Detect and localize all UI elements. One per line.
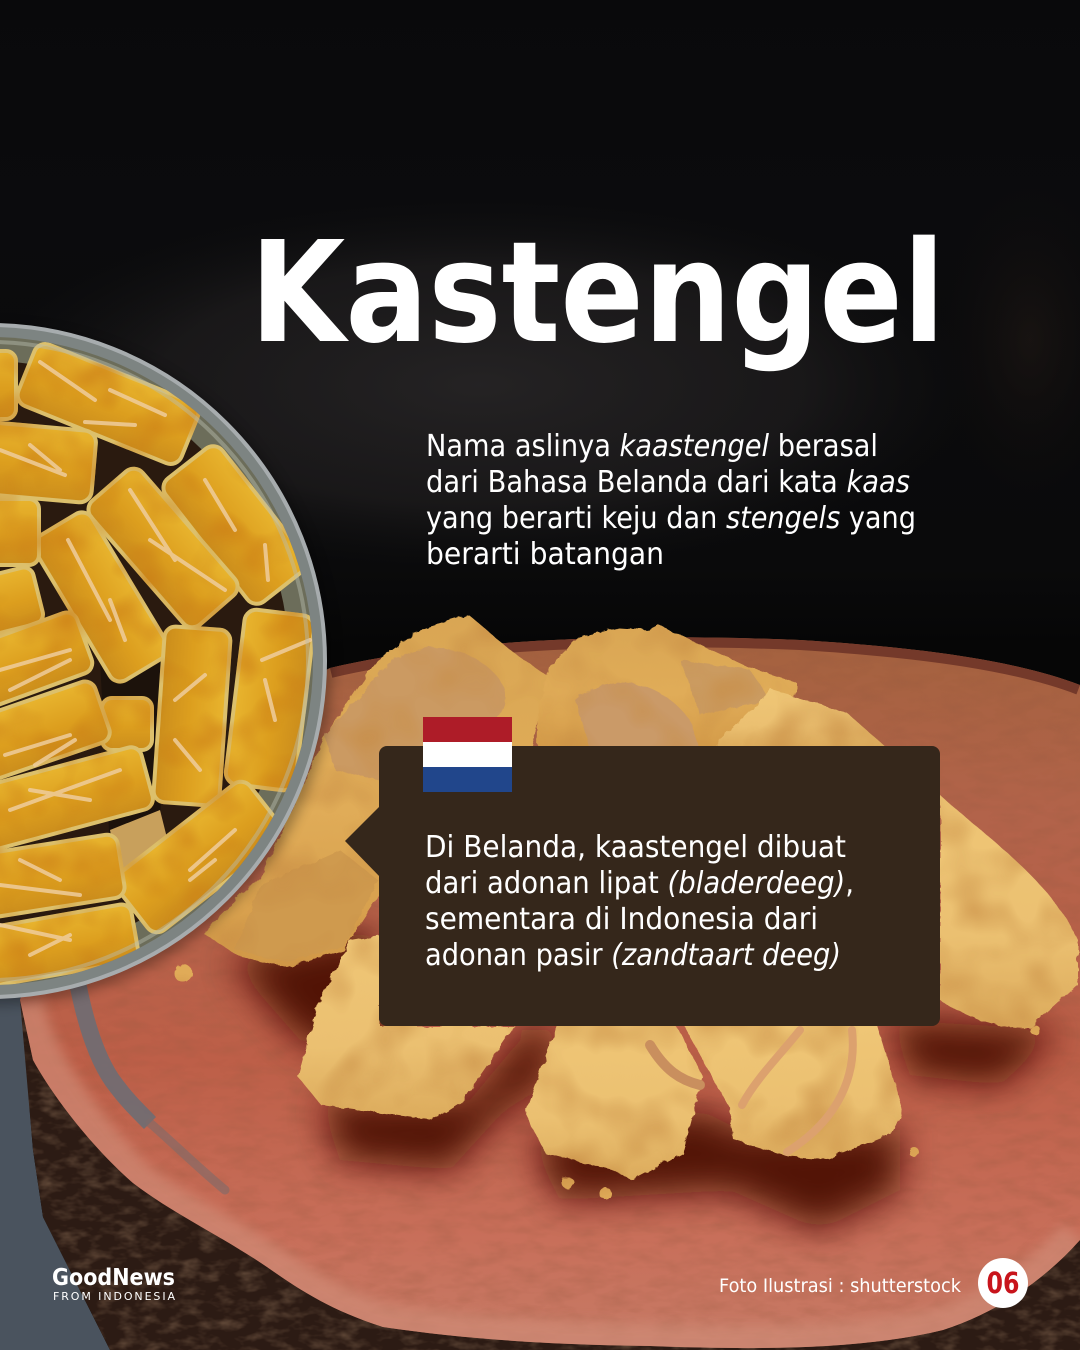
logo: GoodNews from Indonesia <box>52 1265 175 1303</box>
grey stain band <box>78 985 150 1123</box>
page number badge: 06 <box>986 1266 1020 1300</box>
jar rim <box>0 325 325 997</box>
photo: kastengel cookies on slab <box>174 615 1078 1230</box>
callout text: dari adonan lipat (bladerdeeg), <box>425 866 854 901</box>
pale outer ring <box>20 1000 1080 1348</box>
text block: origin of the name: yang berarti keju dan stengels yang <box>426 501 916 536</box>
panel: dough comparison callout <box>345 717 940 1026</box>
photo: jar of cookies <box>0 325 332 1005</box>
photo credit: Foto Ilustrasi : shutterstock <box>719 1275 961 1297</box>
callout text: adonan pasir (zandtaart deeg) <box>425 938 841 973</box>
glass highlight <box>0 342 308 980</box>
page number badge <box>978 1258 1028 1308</box>
callout text: Di Belanda, kaastengel dibuat <box>425 830 846 865</box>
text block: origin of the name <box>426 429 916 572</box>
cookie: top left <box>203 615 549 967</box>
cookie: bottom right <box>683 1024 903 1160</box>
cheese strips <box>742 1030 853 1152</box>
cookie: top right <box>712 690 887 748</box>
callout pointer <box>345 805 381 878</box>
icon: Dutch flag <box>423 717 512 792</box>
cookie: bottom centre <box>525 1024 703 1180</box>
text block: origin of the name: berarti batangan <box>426 537 664 572</box>
wooden slab <box>0 620 1080 1350</box>
callout text <box>425 830 854 973</box>
callout box <box>379 746 940 1026</box>
title: Kastengel <box>250 212 945 375</box>
text block: origin of the name: dari Bahasa Belanda dari kata kaas <box>426 465 910 500</box>
cookie shadows <box>230 930 1060 1230</box>
cookie: right <box>940 795 1078 1028</box>
logo: GoodNews from Indonesia: GoodNews <box>52 1265 175 1291</box>
slab top surface <box>20 637 1080 1348</box>
slab bark side <box>0 990 1080 1350</box>
callout text: sementara di Indonesia dari <box>425 902 818 937</box>
crumbs <box>174 964 1040 1199</box>
cookie: top centre <box>538 625 797 750</box>
text block: origin of the name: Nama aslinya kaastengel berasal <box>426 429 878 464</box>
top rim <box>330 637 1080 685</box>
logo: GoodNews from Indonesia: FROM INDONESIA <box>53 1290 175 1303</box>
cloth under slab <box>0 990 110 1350</box>
cookie: bottom left <box>298 935 515 1120</box>
